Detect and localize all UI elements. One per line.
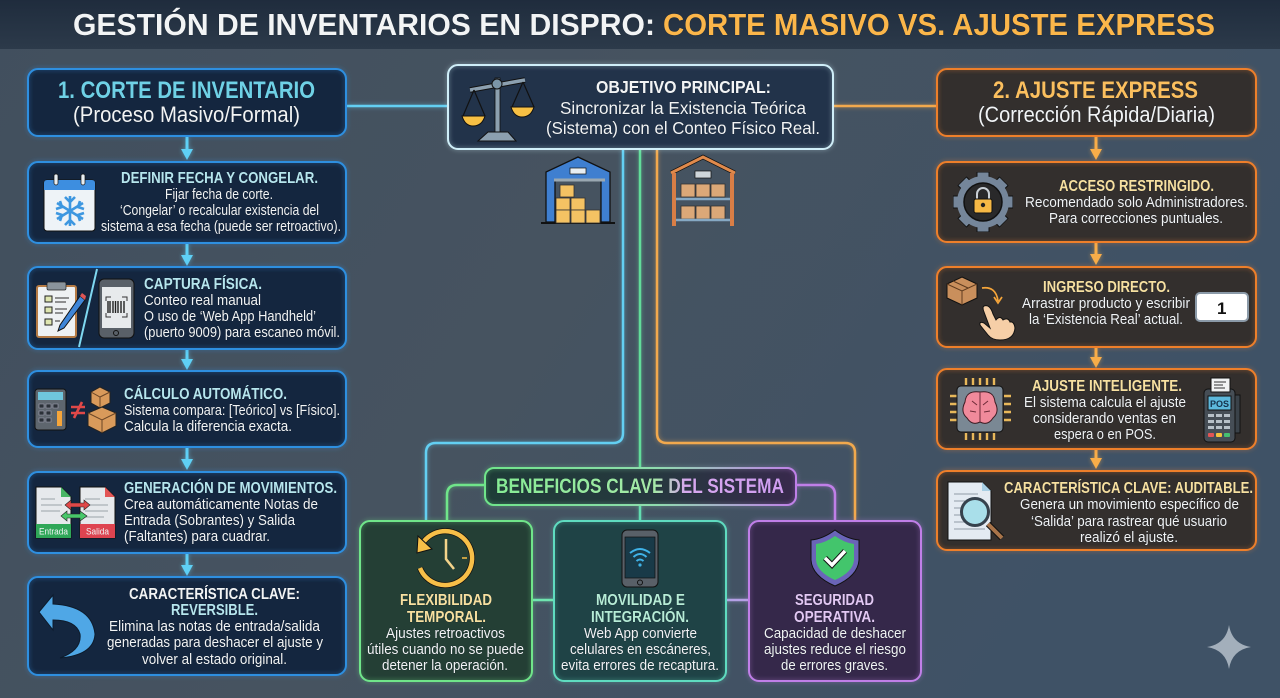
step text: Elimina las notas de entrada/salida xyxy=(109,618,321,635)
step text xyxy=(1024,378,1186,443)
icon: entrada and salida documents: Entrada xyxy=(39,526,68,536)
card text: MOVILIDAD E xyxy=(596,592,685,609)
panel: 1. corte de inventario heading: 1. CORTE DE INVENTARIO xyxy=(58,77,315,104)
step text: (puerto 9009) para escaneo móvil. xyxy=(144,324,340,341)
step text: espera o en POS. xyxy=(1054,426,1156,443)
panel: flexibilidad temporal xyxy=(360,521,532,681)
step text: (Faltantes) para cuadrar. xyxy=(124,528,270,545)
objective text: Sincronizar la Existencia Teórica xyxy=(560,98,806,118)
card text: Web App convierte xyxy=(584,625,697,642)
panel: calculo automatico xyxy=(28,371,346,447)
icon: phone with wifi xyxy=(622,530,658,587)
input field xyxy=(1196,293,1248,321)
step text: O uso de ‘Web App Handheld’ xyxy=(144,308,316,325)
step text: REVERSIBLE. xyxy=(171,602,258,619)
step text: realizó el ajuste. xyxy=(1080,529,1178,546)
icon: phone with barcode xyxy=(99,279,134,338)
step text: Conteo real manual xyxy=(144,292,261,309)
step text: Fijar fecha de corte. xyxy=(165,186,273,203)
icon: clock with back arrow xyxy=(417,531,472,585)
objective text: OBJETIVO PRINCIPAL: xyxy=(596,77,771,97)
icon: POS terminal xyxy=(1204,378,1240,442)
objective text xyxy=(546,77,820,138)
step text: El sistema calcula el ajuste xyxy=(1024,394,1186,411)
panel: reversible xyxy=(28,577,346,675)
step text: Calcula la diferencia exacta. xyxy=(124,418,292,435)
step text xyxy=(124,479,337,545)
panel: objective xyxy=(448,65,833,149)
step text xyxy=(144,276,340,341)
card text: Capacidad de deshacer xyxy=(764,625,906,642)
icon: orange warehouse shelf xyxy=(671,157,735,226)
icon: calendar with snowflake xyxy=(44,174,95,231)
icon: shield with check xyxy=(811,530,859,586)
title banner: CORTE MASIVO VS. AJUSTE EXPRESS xyxy=(663,7,1215,42)
card text: útiles cuando no se puede xyxy=(367,641,524,658)
step text: la ‘Existencia Real’ actual. xyxy=(1029,311,1183,328)
icon: blue warehouse xyxy=(541,157,615,223)
step text: AJUSTE INTELIGENTE. xyxy=(1032,378,1182,395)
card text: FLEXIBILIDAD xyxy=(400,592,492,609)
step text: Para correcciones puntuales. xyxy=(1049,210,1223,227)
icon: document with magnifier xyxy=(948,482,1002,540)
step text xyxy=(1025,178,1248,227)
card text: TEMPORAL. xyxy=(407,609,486,626)
connectors from objective to benefit panels xyxy=(347,106,937,600)
panel: movilidad e integracion xyxy=(554,521,726,681)
step text: GENERACIÓN DE MOVIMIENTOS. xyxy=(124,479,337,497)
title banner: GESTIÓN DE INVENTARIOS EN DISPRO: xyxy=(73,6,655,42)
divider slash xyxy=(79,269,97,347)
card text: Ajustes retroactivos xyxy=(386,625,505,642)
card text: detener la operación. xyxy=(382,657,508,674)
panel: generacion de movimientos xyxy=(28,472,346,553)
card text xyxy=(764,592,906,674)
step text: DEFINIR FECHA Y CONGELAR. xyxy=(121,170,318,187)
panel: 2. ajuste express heading: (Corrección Rápida/Diaria) xyxy=(978,102,1215,127)
objective text: (Sistema) con el Conteo Físico Real. xyxy=(546,118,820,138)
panel: captura fisica xyxy=(28,267,346,349)
step text: ‘Salida’ para rastrear qué usuario xyxy=(1031,513,1227,530)
title banner xyxy=(0,0,1280,49)
card text: de errores graves. xyxy=(781,657,888,674)
icon: undo arrow xyxy=(39,595,95,658)
icon: entrada and salida documents: Salida xyxy=(86,526,109,536)
step text: considerando ventas en xyxy=(1033,410,1176,427)
step text: CARACTERÍSTICA CLAVE: xyxy=(129,586,300,603)
panel: 1. corte de inventario heading xyxy=(28,69,346,136)
icon: POS terminal: POS xyxy=(1210,399,1229,410)
step text: Crea automáticamente Notas de xyxy=(124,496,318,513)
step text: Genera un movimiento específico de xyxy=(1020,496,1239,513)
step text xyxy=(1004,480,1253,546)
panel: ingreso directo xyxy=(937,267,1256,347)
card text: INTEGRACIÓN. xyxy=(591,608,689,626)
card text xyxy=(367,592,524,674)
card text: SEGURIDAD xyxy=(795,592,874,609)
heading: beneficios clave del sistema: BENEFICIOS CLAVE DEL SISTEMA xyxy=(496,475,784,498)
step text: ‘Congelar’ o recalcular existencia del xyxy=(120,202,319,219)
card text: OPERATIVA. xyxy=(794,609,875,626)
step text: generadas para deshacer el ajuste y xyxy=(107,634,323,651)
panel: acceso restringido xyxy=(937,162,1256,242)
step text: ACCESO RESTRINGIDO. xyxy=(1059,178,1214,195)
step text: Sistema compara: [Teórico] vs [Físico]. xyxy=(124,402,340,419)
step text: volver al estado original. xyxy=(142,651,287,668)
panel: auditable xyxy=(937,471,1256,550)
panel: ajuste inteligente xyxy=(937,369,1256,449)
icon: sparkle watermark xyxy=(1207,625,1251,669)
card text: ajustes reduce el riesgo xyxy=(764,641,906,658)
arrows: right column flow xyxy=(1090,137,1102,469)
step text: CAPTURA FÍSICA. xyxy=(144,276,262,293)
card text: evita errores de recaptura. xyxy=(561,657,719,674)
icon: box and pointing hand xyxy=(947,277,1015,340)
step text: Entrada (Sobrantes) y Salida xyxy=(124,512,296,529)
icon: entrada and salida documents xyxy=(36,487,115,538)
icon: chip with brain xyxy=(950,378,1011,440)
icon: calculator not equal boxes xyxy=(35,387,116,433)
icon: gear with padlock xyxy=(953,172,1013,232)
step text: sistema a esa fecha (puede ser retroactivo). xyxy=(101,218,341,235)
panel: 1. corte de inventario heading: (Proceso Masivo/Formal) xyxy=(73,102,300,127)
step text xyxy=(107,586,323,668)
step text xyxy=(124,386,340,435)
panel: 2. ajuste express heading xyxy=(937,69,1256,136)
step text xyxy=(1022,279,1190,328)
card text: celulares en escáneres, xyxy=(570,641,711,658)
panel: seguridad operativa xyxy=(749,521,921,681)
arrows: left column flow xyxy=(181,137,193,576)
step text: CÁLCULO AUTOMÁTICO. xyxy=(124,386,287,403)
step text xyxy=(101,170,341,235)
card text xyxy=(561,592,719,674)
panel: 2. ajuste express heading: 2. AJUSTE EXPRESS xyxy=(993,77,1198,104)
heading: beneficios clave del sistema xyxy=(485,468,796,505)
icon: balance scales xyxy=(462,78,534,141)
step text: Arrastrar producto y escribir xyxy=(1022,295,1190,312)
step text: INGRESO DIRECTO. xyxy=(1043,279,1170,296)
input field: 1 xyxy=(1217,299,1226,318)
panel: definir fecha y congelar xyxy=(28,162,346,243)
icon: clipboard and pen xyxy=(37,282,86,337)
step text: Recomendado solo Administradores. xyxy=(1025,194,1248,211)
